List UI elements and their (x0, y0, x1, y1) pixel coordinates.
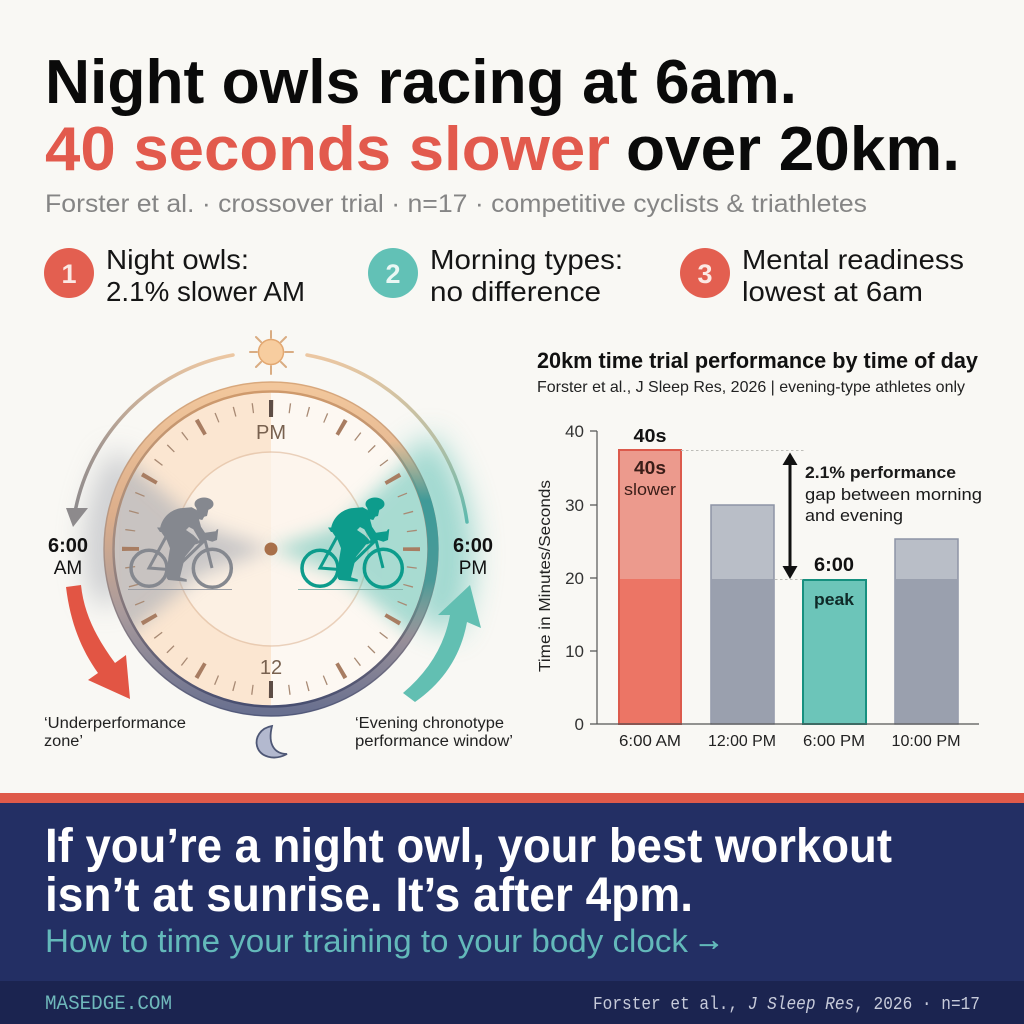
x axis: 10:00 PM (892, 733, 960, 750)
bar: 6:00 AM: 40s (634, 426, 666, 446)
finding 2 text (430, 244, 623, 307)
bar: 6:00 PM (803, 555, 866, 724)
finding 1 text (106, 244, 305, 307)
gap reference lines (681, 450, 805, 580)
panel: call to action (0, 793, 1024, 981)
brand: MASEDGE.COM (45, 993, 172, 1016)
arrow: red underperformance (66, 585, 130, 699)
finding 1 (44, 244, 305, 307)
clock face (114, 392, 428, 706)
x axis: 12:00 PM (708, 733, 776, 750)
arrow: double-headed gap (782, 452, 798, 579)
badge 3 (680, 248, 730, 298)
center dot (264, 542, 278, 556)
takeaway headline: isn’t at sunrise. It’s after 4pm. (45, 869, 693, 922)
cyclist: grey morning (128, 498, 232, 590)
chart source: Forster et al., J Sleep Res, 2026 | evening-type athletes only (537, 379, 965, 396)
y axis: Time in Minutes/Seconds (537, 480, 554, 672)
arrow: teal performance window (403, 585, 481, 702)
bar: 6:00 AM: slower (624, 480, 676, 499)
y axis: 40 (565, 422, 584, 441)
takeaway headline: If you’re a night owl, your best workout (45, 820, 892, 873)
badge 2 (368, 248, 418, 298)
clock labels (256, 422, 286, 679)
bar: 12:00 PM (711, 505, 774, 724)
cyclist: teal evening (298, 498, 403, 590)
x axis (590, 724, 979, 750)
clock ticks (129, 400, 413, 698)
panel: bar chart (537, 348, 982, 750)
gap annotation: 2.1% performance (805, 463, 956, 482)
icon: sun (250, 331, 293, 374)
clock labels: PM (256, 422, 286, 444)
subtitle: Forster et al. · crossover trial · n=17 · competitive cyclists & triathletes (45, 190, 867, 218)
title: over 20km. (626, 115, 960, 184)
title: Night owls racing at 6am. (45, 48, 797, 117)
footer bar (0, 981, 1024, 1024)
finding 2 text: no difference (430, 276, 601, 307)
clock ring (104, 382, 438, 716)
takeaway headline (45, 820, 892, 922)
finding 1 text: 2.1% slower AM (106, 276, 305, 307)
badge 2: 2 (385, 259, 401, 289)
label: 6:00 PM (453, 535, 493, 579)
glow outside clock (104, 450, 447, 625)
label: underperformance zone: zone’ (44, 733, 83, 750)
arrow: right arc (307, 355, 467, 522)
label: 6:00 AM (48, 535, 88, 579)
arrow: left arc (66, 355, 233, 527)
navy band (0, 803, 1024, 981)
gap annotation: gap between morning (805, 485, 982, 504)
finding 3 text: Mental readiness (742, 244, 964, 275)
badge 1: 1 (61, 259, 77, 289)
label: evening window: ‘Evening chronotype (355, 715, 504, 732)
x axis: 6:00 AM (619, 733, 681, 750)
finding 3 text (742, 244, 964, 307)
badge 3: 3 (697, 259, 713, 289)
finding 2 (368, 244, 623, 307)
finding 3 text: lowest at 6am (742, 276, 923, 307)
title (45, 48, 960, 184)
accent stripe (0, 793, 1024, 803)
y axis: 20 (565, 569, 584, 588)
label: evening window (355, 715, 513, 750)
gap annotation (805, 463, 982, 525)
y axis: 30 (565, 496, 584, 515)
y axis: 10 (565, 642, 584, 661)
label: 6:00 PM: 6:00 (453, 535, 493, 557)
clock labels: 12 (260, 657, 282, 679)
label: evening window: performance window’ (355, 733, 513, 750)
label: 6:00 PM: PM (459, 558, 487, 579)
bar: 6:00 AM (619, 426, 681, 724)
chart heading: 20km time trial performance by time of day (537, 348, 979, 373)
finding 3 (680, 244, 964, 307)
finding 1 text: Night owls: (106, 244, 249, 275)
label: 6:00 AM: 6:00 (48, 535, 88, 557)
finding 2 text: Morning types: (430, 244, 623, 275)
panel: clock diagram (44, 331, 513, 757)
label: 6:00 AM: AM (54, 558, 82, 579)
y axis (537, 422, 597, 734)
x axis: 6:00 PM (803, 733, 865, 750)
badge 1 (44, 248, 94, 298)
label: underperformance zone (44, 715, 186, 750)
bar: 6:00 AM: 40s (634, 458, 666, 478)
bar: 6:00 PM: 6:00 (814, 555, 854, 576)
bar: 6:00 PM: peak (814, 590, 855, 609)
label: underperformance zone: ‘Underperformance (44, 715, 186, 732)
citation: Forster et al., J Sleep Res, 2026 · n=17 (593, 995, 980, 1015)
icon: moon (257, 726, 287, 757)
gap annotation: and evening (805, 506, 903, 525)
call to action link: → (694, 924, 724, 957)
call to action link: How to time your training to your body clock (45, 923, 689, 959)
title: 40 seconds slower (45, 115, 610, 184)
y axis: 0 (575, 715, 584, 734)
bar: 10:00 PM (895, 539, 958, 724)
